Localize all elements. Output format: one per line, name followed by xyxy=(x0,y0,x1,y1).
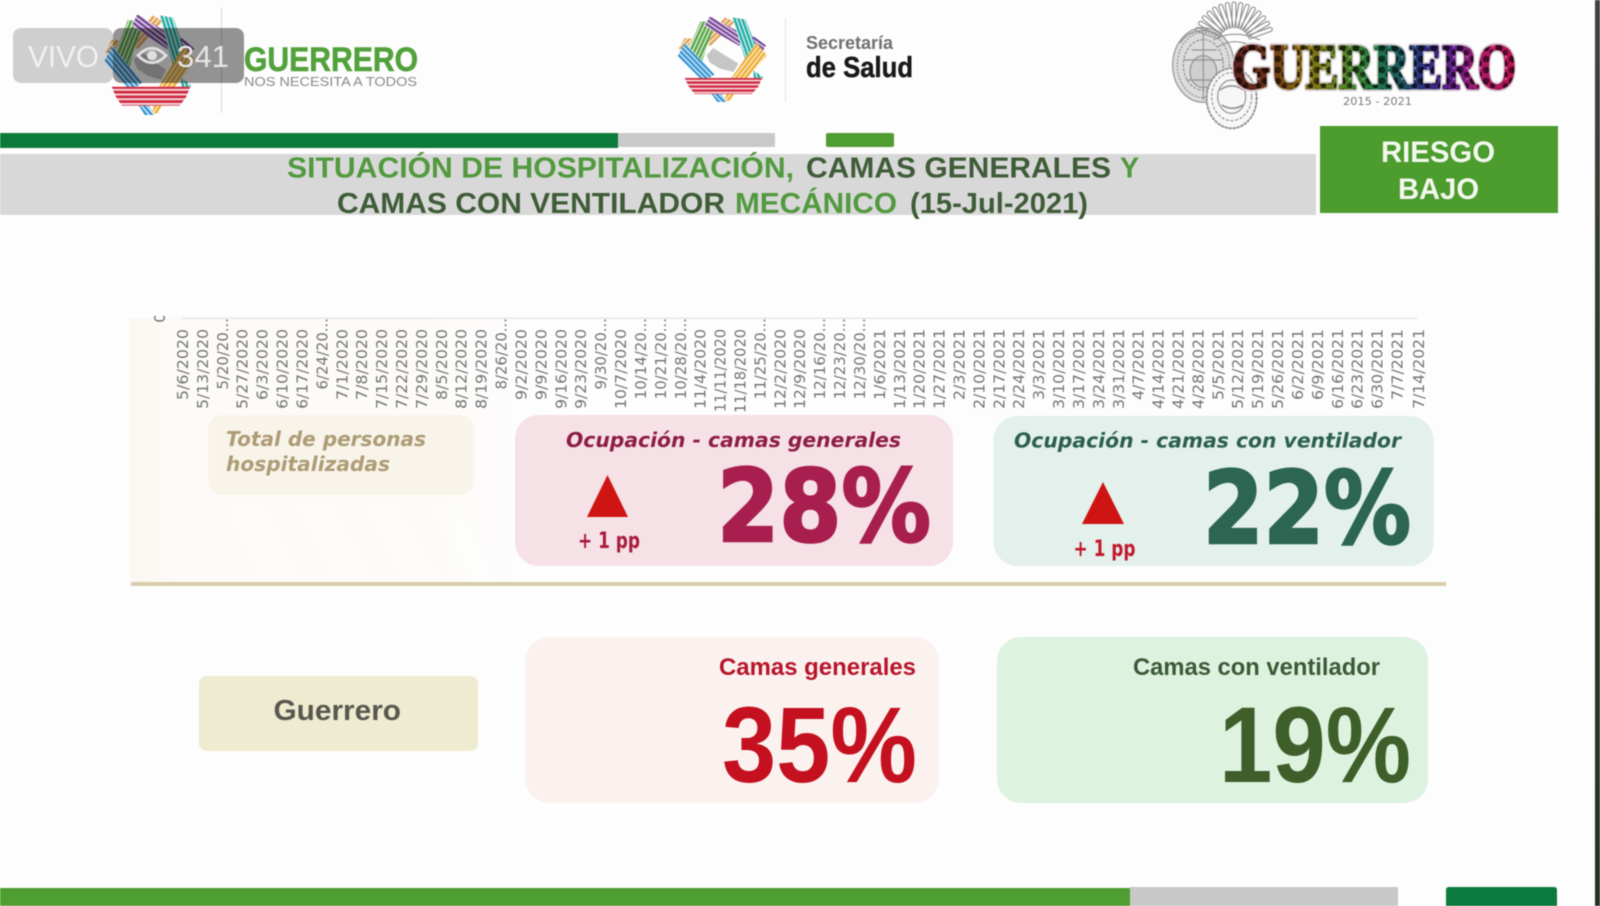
date axis labels xyxy=(174,318,1428,413)
date axis labels: 2/24/2021 xyxy=(1010,329,1028,409)
panel title: Ocupación - camas generales xyxy=(566,428,901,452)
date axis labels: 2/10/2021 xyxy=(970,329,988,409)
icon: coat of arms line art xyxy=(1173,2,1273,128)
label: de Salud: de Salud xyxy=(806,52,913,84)
date axis labels: 5/13/2020 xyxy=(194,329,212,409)
title line 2: MECÁNICO xyxy=(735,186,897,220)
date axis labels: 7/22/2020 xyxy=(393,329,411,409)
date axis labels: 3/31/2021 xyxy=(1110,329,1128,409)
date axis labels: 10/7/2020 xyxy=(612,329,630,409)
date axis labels: 12/9/2020 xyxy=(791,329,809,409)
date axis labels: 5/5/2021 xyxy=(1209,329,1227,400)
date axis labels: 3/24/2021 xyxy=(1090,329,1108,409)
date axis labels: 9/30/20... xyxy=(592,318,610,390)
panel title: Camas generales xyxy=(719,654,916,681)
date axis labels: 5/20/20... xyxy=(214,318,232,390)
date axis labels: 7/29/2020 xyxy=(413,329,431,409)
icon: eye xyxy=(138,48,166,63)
date axis labels: 2/3/2021 xyxy=(950,329,968,400)
date axis labels: 9/16/2020 xyxy=(552,329,570,409)
risk label line 1: RIESGO xyxy=(1381,136,1495,169)
date axis labels: 6/3/2020 xyxy=(254,329,272,400)
years: 2015 - 2021 xyxy=(1343,95,1412,108)
footer bars xyxy=(0,887,1557,906)
date axis labels: 7/14/2021 xyxy=(1410,329,1428,409)
state name: Guerrero xyxy=(274,695,401,727)
date axis labels: 6/2/2021 xyxy=(1289,329,1307,400)
panel title: Camas con ventilador xyxy=(1133,654,1380,681)
date axis labels: 7/1/2020 xyxy=(333,329,351,400)
icon: woven emblem centre xyxy=(678,16,767,102)
date axis labels: 9/9/2020 xyxy=(532,329,550,400)
panel: Guerrero label xyxy=(199,676,478,751)
wordmark: GUERRERO: GUERRERO xyxy=(244,41,418,79)
title line 1: CAMAS GENERALES xyxy=(806,152,1111,184)
date axis labels: 1/20/2021 xyxy=(911,329,929,409)
panel: total de personas hospitalizadas xyxy=(208,415,474,495)
date axis labels: 10/14/20... xyxy=(632,318,650,399)
date axis labels: 4/14/2021 xyxy=(1150,329,1168,409)
date axis labels: 8/5/2020 xyxy=(433,329,451,400)
panel: camas generales xyxy=(526,637,938,805)
panel: ocupación camas con ventilador xyxy=(994,416,1434,567)
axis zero tick: 0 xyxy=(151,313,169,323)
logo: Secretaría de Salud xyxy=(678,16,913,102)
chart watermark background xyxy=(130,318,520,582)
date axis labels: 6/9/2021 xyxy=(1309,329,1327,400)
date axis labels: 5/27/2020 xyxy=(234,329,252,409)
right edge strip xyxy=(1595,0,1600,906)
date axis labels: 6/10/2020 xyxy=(274,329,292,409)
change label: + 1 pp xyxy=(1074,537,1136,562)
risk label line 2: BAJO xyxy=(1398,173,1479,206)
date axis labels: 3/3/2021 xyxy=(1030,329,1048,400)
date axis labels: 9/23/2020 xyxy=(572,329,590,409)
value 35%: 35% xyxy=(722,684,917,805)
tagline: NOS NECESITA A TODOS xyxy=(244,74,417,89)
live label: VIVO xyxy=(28,39,99,74)
label: Secretaría: Secretaría xyxy=(806,32,894,53)
title line 2 xyxy=(337,186,1088,220)
date axis labels: 3/10/2021 xyxy=(1050,329,1068,409)
date axis labels: 5/19/2021 xyxy=(1249,329,1267,409)
date axis labels: 5/6/2020 xyxy=(174,329,192,400)
date axis labels: 1/27/2021 xyxy=(931,329,949,409)
date axis labels: 7/15/2020 xyxy=(373,329,391,409)
date axis labels: 5/12/2021 xyxy=(1229,329,1247,409)
wordmark texture: GUERRERO xyxy=(1232,31,1516,102)
date axis labels: 12/23/20... xyxy=(831,318,849,399)
icon: up triangle xyxy=(1082,482,1124,524)
date axis labels: 5/26/2021 xyxy=(1269,329,1287,409)
icon: up triangle xyxy=(587,475,628,517)
date axis labels: 4/7/2021 xyxy=(1130,329,1148,400)
date axis labels: 10/21/20... xyxy=(652,318,670,399)
panel title: Ocupación - camas con ventilador xyxy=(1014,428,1402,452)
date axis labels: 11/11/2020 xyxy=(712,329,730,412)
date axis labels: 11/4/2020 xyxy=(692,329,710,409)
date axis labels: 6/17/2020 xyxy=(294,329,312,409)
title line 2: (15-Jul-2021) xyxy=(910,188,1088,220)
date axis labels: 12/2/2020 xyxy=(771,329,789,409)
date axis labels: 8/19/2020 xyxy=(473,329,491,409)
date axis labels: 11/25/20... xyxy=(751,318,769,399)
icon: woven emblem left xyxy=(105,14,195,115)
date axis labels: 10/28/20... xyxy=(672,318,690,399)
date axis labels: 9/2/2020 xyxy=(512,329,530,400)
value 28%: 28% xyxy=(717,448,931,565)
date axis labels: 11/18/2020 xyxy=(732,329,750,413)
date axis labels: 7/7/2021 xyxy=(1388,329,1406,400)
date axis labels: 6/24/20... xyxy=(313,318,331,390)
date axis labels: 8/12/2020 xyxy=(453,329,471,409)
header divider bars xyxy=(0,133,894,148)
title band xyxy=(0,150,1316,220)
date axis labels: 4/21/2021 xyxy=(1170,329,1188,409)
panel label line 2: hospitalizadas xyxy=(226,452,390,476)
value 22%: 22% xyxy=(1203,450,1411,567)
title line 1 xyxy=(287,150,1139,184)
change label: + 1 pp xyxy=(578,529,640,554)
date axis labels: 3/17/2021 xyxy=(1070,329,1088,409)
wordmark: GUERRERO colour: GUERRERO xyxy=(1232,31,1516,102)
date axis labels: 4/28/2021 xyxy=(1189,329,1207,409)
date axis labels: 8/26/20... xyxy=(493,318,511,390)
panel label line 1: Total de personas xyxy=(226,427,426,451)
logo: Guerrero 2015-2021 xyxy=(1173,2,1516,128)
date axis labels: 2/17/2021 xyxy=(990,329,1008,409)
viewer count: 341 xyxy=(177,39,229,74)
logo: Guerrero nos necesita a todos xyxy=(105,8,418,115)
wordmark bold fill: GUERRERO xyxy=(1232,31,1516,102)
live stream badge xyxy=(13,28,244,83)
panel: ocupación camas generales xyxy=(515,415,953,566)
title line 1: SITUACIÓN DE HOSPITALIZACIÓN, xyxy=(287,150,794,184)
date axis labels: 7/8/2020 xyxy=(353,329,371,400)
title line 1: Y xyxy=(1120,152,1139,184)
date axis labels: 1/13/2021 xyxy=(891,329,909,409)
panel: camas con ventilador xyxy=(997,637,1428,805)
date axis labels: 6/16/2021 xyxy=(1329,329,1347,409)
value 19%: 19% xyxy=(1219,684,1411,805)
date axis labels: 12/16/20... xyxy=(811,318,829,399)
date axis labels: 1/6/2021 xyxy=(871,329,889,400)
date axis labels: 12/30/20... xyxy=(851,318,869,399)
risk badge xyxy=(1320,126,1558,213)
title line 2: CAMAS CON VENTILADOR xyxy=(337,188,725,220)
date axis labels: 6/23/2021 xyxy=(1349,329,1367,409)
date axis labels: 6/30/2021 xyxy=(1369,329,1387,409)
